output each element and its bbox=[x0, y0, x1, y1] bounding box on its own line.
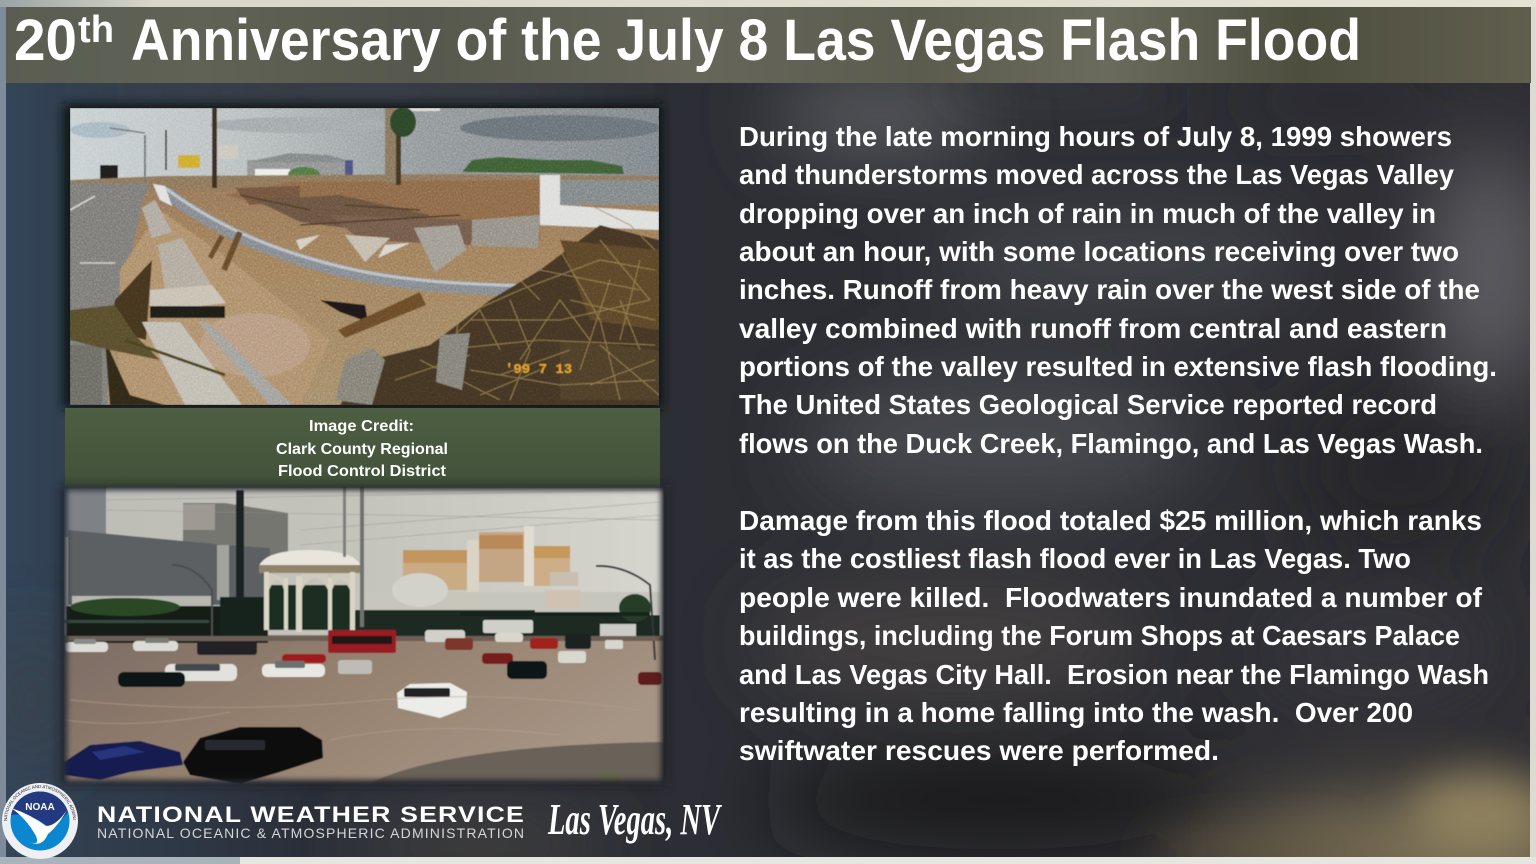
text block: flood description: The United States Geological Service reported record bbox=[739, 389, 1437, 420]
text block: flood description bbox=[739, 121, 1497, 459]
photo: flooded Las Vegas Strip intersection bbox=[60, 485, 666, 786]
footer logo: NOAA seal bbox=[2, 783, 78, 859]
title: th bbox=[78, 9, 114, 51]
poles bbox=[236, 490, 244, 600]
image credit band bbox=[65, 408, 660, 487]
vehicles in floodwater bbox=[64, 638, 662, 784]
far buildings and signs bbox=[247, 160, 352, 177]
Mirage building bbox=[402, 562, 468, 590]
text block: damage summary: swiftwater rescues were performed. bbox=[739, 735, 1219, 766]
title: Anniversary of the July 8 Las Vegas Flash Flood bbox=[131, 8, 1361, 73]
text block: flood description: valley combined with runoff from central and eastern bbox=[739, 313, 1447, 344]
text block: flood description: about an hour, with some locations receiving over two bbox=[739, 236, 1459, 267]
footer: Las Vegas, NV signature: Las Vegas, NV bbox=[547, 795, 722, 844]
eroded channel bbox=[118, 210, 330, 405]
upper dirt and debris bbox=[225, 180, 540, 240]
text block: flood description: During the late morning hours of July 8, 1999 showers bbox=[739, 121, 1452, 152]
text block: flood description: portions of the valley resulted in extensive flash flooding. bbox=[739, 351, 1497, 382]
text block: damage summary: Damage from this flood totaled $25 million, which ranks bbox=[739, 505, 1482, 536]
blue car bbox=[64, 741, 183, 780]
credit text: Flood Control District bbox=[278, 463, 447, 480]
date stamp: '99 7 13 bbox=[505, 362, 572, 378]
text block: damage summary bbox=[739, 505, 1489, 766]
text block: damage summary: resulting in a home falling into the wash. Over 200 bbox=[739, 697, 1413, 728]
footer logo: NOAA seal: NOAA bbox=[25, 802, 55, 813]
text block: damage summary: buildings, including the Forum Shops at Caesars Palace bbox=[739, 620, 1460, 651]
signs and gantry bbox=[550, 572, 578, 586]
casino buildings bbox=[64, 487, 106, 537]
footer: National Weather Service wordmark: NATIONAL OCEANIC & ATMOSPHERIC ADMINISTRATION bbox=[97, 825, 524, 841]
red trolley bbox=[328, 630, 396, 653]
road bbox=[70, 183, 150, 405]
text block: flood description: flows on the Duck Creek, Flamingo, and Las Vegas Wash. bbox=[739, 428, 1483, 459]
footer: National Weather Service wordmark: NATIONAL WEATHER SERVICE bbox=[97, 802, 525, 827]
white SUV bbox=[397, 683, 467, 718]
title bar bbox=[6, 7, 1531, 83]
photo: flood damage to roadside bbox=[63, 104, 663, 409]
left-side brush bbox=[70, 305, 160, 360]
trees bbox=[66, 605, 221, 644]
text block: damage summary: it as the costliest flash flood ever in Las Vegas. Two bbox=[739, 543, 1411, 574]
credit text: Clark County Regional bbox=[276, 441, 448, 458]
credit text: Image Credit: bbox=[309, 418, 414, 435]
text block: damage summary: people were killed. Floodwaters inundated a number of bbox=[739, 582, 1483, 613]
credit text bbox=[276, 418, 448, 480]
guard rail bbox=[165, 192, 530, 290]
text block: flood description: inches. Runoff from heavy rain over the west side of the bbox=[739, 274, 1480, 305]
utility poles and palm bbox=[212, 108, 217, 188]
wood posts bbox=[224, 232, 240, 270]
driftwood brush pile bbox=[340, 225, 659, 405]
caesars rotunda bbox=[259, 550, 361, 632]
curb slabs bbox=[142, 200, 172, 238]
footer: National Weather Service wordmark bbox=[97, 802, 525, 841]
broken concrete bbox=[414, 225, 466, 272]
text block: flood description: and thunderstorms moved across the Las Vegas Valley bbox=[739, 159, 1454, 190]
text block: flood description: dropping over an inch of rain in much of the valley in bbox=[739, 198, 1436, 229]
shadowed curb bbox=[370, 742, 664, 783]
far vehicles bbox=[425, 620, 636, 663]
black SUV bbox=[183, 727, 323, 784]
text block: damage summary: and Las Vegas City Hall. Erosion near the Flamingo Wash bbox=[739, 659, 1489, 690]
title: 20 bbox=[14, 8, 77, 73]
colonnade and low wall bbox=[466, 592, 660, 614]
footer logo: NOAA seal: NATIONAL OCEANIC AND ATMOSPHERIC ADMINISTRATION bbox=[4, 785, 76, 821]
